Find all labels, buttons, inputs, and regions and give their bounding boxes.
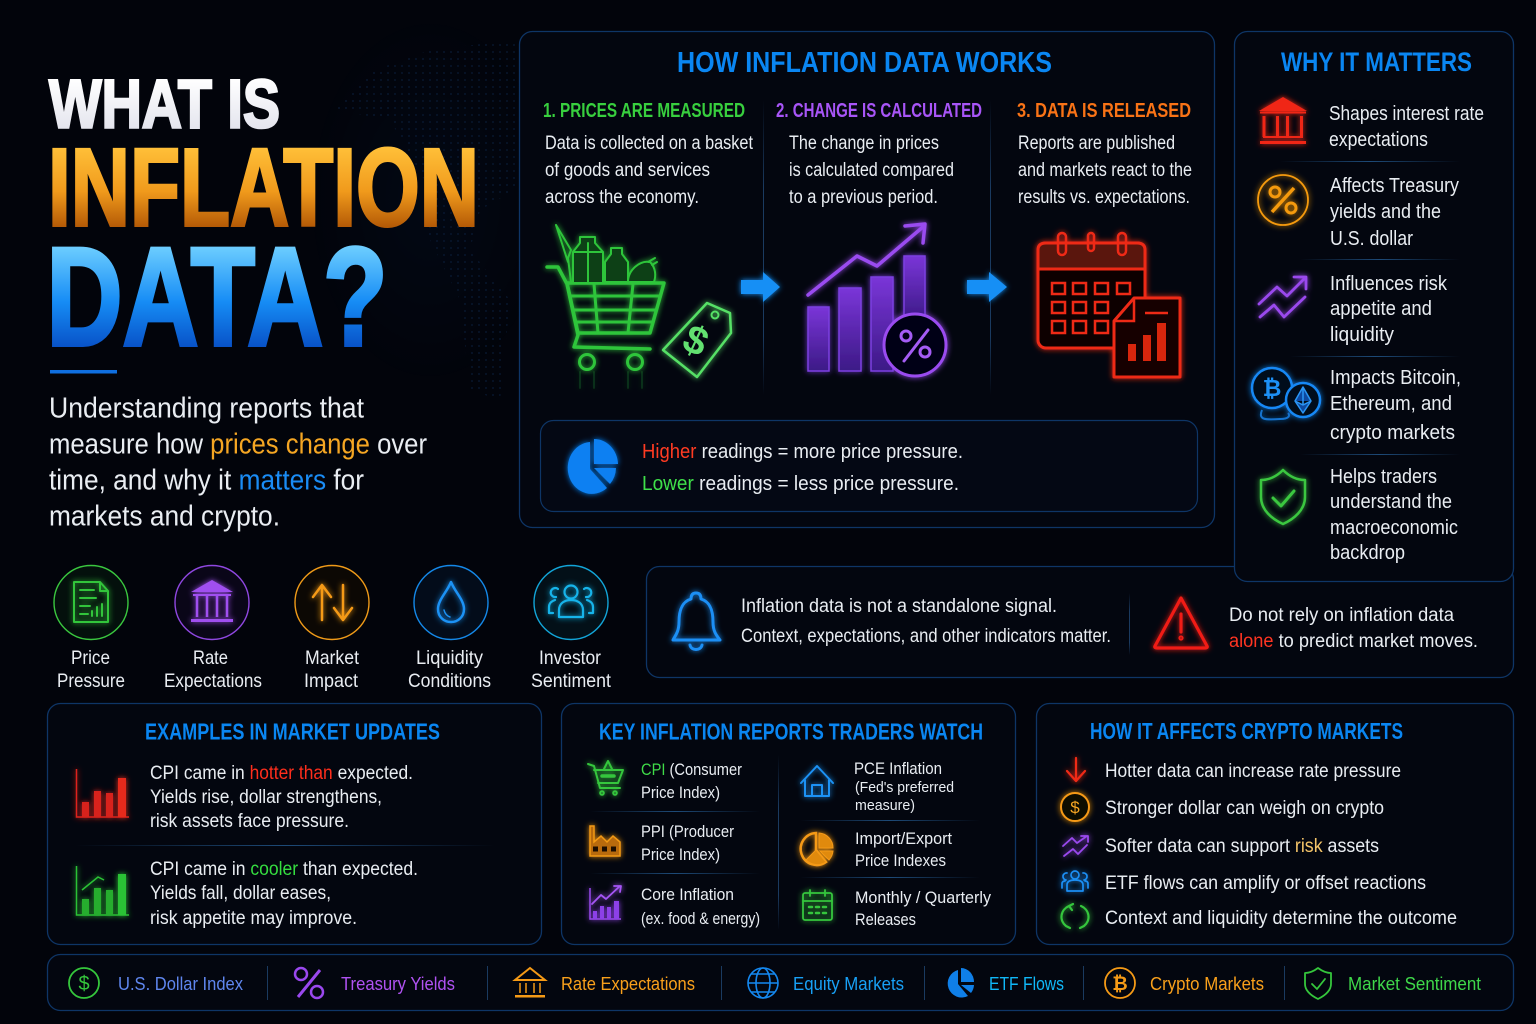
item: rate expectations: Rate Expectations [561, 974, 695, 994]
item text: traders: understand the [1330, 491, 1452, 513]
report text: core: (ex. food & energy) [641, 909, 760, 928]
callout text: Lower readings = less price pressure. [642, 473, 959, 495]
step 2 text: The change in prices [789, 133, 939, 154]
panel: how it affects crypto markets [1036, 704, 1514, 944]
icon: shopping cart with price tag [547, 225, 731, 388]
report text: monthly: Releases [855, 910, 916, 929]
concept: price pressure [54, 566, 128, 692]
concept: rate expectations: Expectations [164, 670, 262, 692]
item text: crypto impact [1330, 367, 1461, 444]
icon: bell [673, 593, 720, 650]
row text: context: Context and liquidity determine the outcome [1105, 908, 1457, 929]
item: treasury yields [295, 968, 455, 998]
icon: purple bar chart with percent [808, 224, 946, 376]
item: rate expectations [515, 968, 695, 998]
report text: PCE [854, 759, 954, 814]
report text: import export [855, 829, 952, 870]
item text: interest rate [1329, 103, 1484, 151]
callout text: Higher readings = more price pressure. [642, 441, 963, 463]
icon: red bank [1259, 97, 1307, 144]
item text: treasury yields [1330, 175, 1459, 250]
icon: red bar chart [76, 769, 129, 817]
item: crypto markets: ₿ [1112, 974, 1128, 995]
item: etf flows [948, 968, 1064, 998]
note text: do not rely: alone to predict market moves. [1229, 631, 1478, 652]
report text: PPI: Price Index) [641, 845, 720, 864]
icon: purple chart [590, 886, 621, 919]
item text: treasury yields: yields and the [1330, 201, 1441, 223]
panel: bottom factor strip [48, 954, 1514, 1010]
title: WHAT IS [49, 66, 280, 143]
report text: PCE: (Fed's preferred [855, 779, 954, 796]
report text: import export: Import/Export [855, 829, 952, 848]
note text: do not rely: Do not rely on inflation data [1229, 605, 1454, 626]
item: market sentiment: Market Sentiment [1348, 974, 1481, 994]
step 1 text: 1. PRICES ARE MEASURED [543, 100, 745, 122]
item text: risk appetite: Influences risk [1330, 273, 1448, 295]
example text: hotter: CPI came in hotter than expected. [150, 763, 413, 784]
item text: crypto impact: crypto markets [1330, 422, 1455, 444]
note text: standalone signal [741, 596, 1111, 647]
subtitle: markets and crypto. [49, 500, 280, 532]
item text: traders [1330, 466, 1458, 564]
item text: risk appetite: appetite and [1330, 298, 1432, 320]
step 1 text: of goods and services [545, 160, 710, 181]
concept: rate expectations: Rate [193, 647, 228, 669]
item: U.S. dollar index: U.S. Dollar Index [118, 974, 243, 994]
icon: green calendar [803, 890, 832, 920]
report text: core [641, 885, 760, 928]
row: five concept icons [54, 566, 612, 692]
callout text [642, 441, 963, 495]
note text: do not rely [1229, 605, 1478, 652]
step 3 text: Reports are published [1018, 133, 1175, 154]
example text: cooler [150, 859, 418, 929]
title: INFLATION [48, 126, 479, 250]
subtitle: time, and why it matters for [49, 464, 364, 496]
report text: monthly: Monthly / Quarterly [855, 888, 991, 907]
item text: crypto impact: Impacts Bitcoin, [1330, 367, 1461, 389]
icon: green cycle [1061, 904, 1089, 928]
title [46, 66, 479, 375]
icon: blue pie chart [568, 439, 618, 494]
item text: crypto impact: Ethereum, and [1330, 393, 1452, 415]
item: U.S. dollar index: $ [78, 973, 90, 995]
item text: interest rate: Shapes interest rate [1329, 103, 1484, 125]
icon: red down arrow [1067, 758, 1085, 781]
concept: investor sentiment: Sentiment [531, 670, 612, 692]
concept: price pressure: Pressure [57, 670, 125, 692]
icon: green bar chart [76, 866, 129, 915]
panel: key inflation reports [562, 704, 1016, 944]
example text: hotter [150, 763, 413, 832]
heading: crypto effects: HOW IT AFFECTS CRYPTO MARKETS [1090, 718, 1403, 744]
panel: how inflation data works [520, 32, 1214, 528]
item: etf flows: ETF Flows [989, 974, 1064, 994]
subtitle [49, 392, 427, 532]
icon: purple trend [1063, 836, 1088, 856]
item text: traders: Helps traders [1330, 466, 1437, 488]
concept: market impact: Market [305, 647, 360, 669]
note text: standalone signal: Context, expectations, and other indicators matter. [741, 626, 1111, 647]
step 1 text [543, 100, 754, 208]
subtitle: Understanding reports that [49, 392, 364, 424]
step 3 text [1017, 100, 1192, 208]
title underline [50, 370, 117, 374]
step 3 text: 3. DATA IS RELEASED [1017, 100, 1191, 122]
step 1 text: across the economy. [545, 187, 699, 208]
concept: investor sentiment: Investor [539, 647, 601, 669]
report text: PPI [641, 822, 734, 864]
item: market sentiment [1305, 968, 1481, 999]
item: treasury yields: Treasury Yields [341, 974, 455, 994]
icon: dollar coin: $ [1070, 798, 1080, 817]
step 3 text: results vs. expectations. [1018, 187, 1190, 208]
item: crypto markets: Crypto Markets [1150, 974, 1264, 994]
concept: rate expectations [164, 566, 262, 692]
panel: caution notes [646, 566, 1514, 678]
example text: cooler: risk appetite may improve. [150, 908, 357, 929]
step 2 text: to a previous period. [789, 187, 938, 208]
concept: price pressure: Price [71, 647, 110, 669]
report text: CPI: CPI (Consumer [641, 760, 742, 779]
concept: market impact [295, 566, 369, 692]
concept: liquidity conditions [408, 566, 491, 692]
example text: cooler: Yields fall, dollar eases, [150, 883, 331, 904]
decorative dotted world map [310, 20, 550, 400]
arrow 2 [967, 272, 1007, 302]
example text: hotter: Yields rise, dollar strengthens, [150, 787, 382, 808]
item: crypto markets [1105, 968, 1264, 998]
example text: hotter: risk assets face pressure. [150, 811, 349, 832]
item: equity markets [748, 968, 904, 998]
icon: orange percent circle [1258, 175, 1308, 225]
report text: PCE: measure) [855, 797, 915, 814]
icon: blue people [1062, 871, 1088, 891]
arrow 1 [741, 272, 780, 302]
row text: softer data: Softer data can support risk assets [1105, 836, 1379, 857]
report text: import export: Price Indexes [855, 851, 946, 870]
heading: how inflation data works: HOW INFLATION DATA WORKS [677, 47, 1052, 79]
item text: treasury yields: U.S. dollar [1330, 228, 1413, 250]
icon: warning triangle [1155, 598, 1207, 648]
item text: risk appetite [1330, 273, 1448, 346]
report text: CPI [641, 760, 742, 802]
step 1 text: Data is collected on a basket [545, 133, 754, 154]
item text: traders: backdrop [1330, 542, 1405, 564]
item text: risk appetite: liquidity [1330, 324, 1394, 346]
concept: market impact: Impact [304, 670, 359, 692]
step 2 text: is calculated compared [789, 160, 954, 181]
concept: liquidity conditions: Liquidity [416, 647, 483, 669]
icon: purple trend lines [1259, 277, 1306, 317]
report text: monthly [855, 888, 991, 929]
callout: higher / lower readings [540, 420, 1198, 512]
title: DATA? [46, 218, 388, 375]
item: U.S. dollar index [69, 968, 243, 998]
note text: standalone signal: Inflation data is not a standalone signal. [741, 596, 1057, 617]
step 2 text [776, 100, 982, 208]
panel: why it matters [1234, 32, 1514, 582]
report text: PCE: PCE Inflation [854, 759, 942, 778]
row text: stronger dollar: Stronger dollar can weigh on crypto [1105, 798, 1384, 819]
heading: examples: EXAMPLES IN MARKET UPDATES [145, 718, 440, 744]
icon: dollar coin [1061, 793, 1089, 821]
step 3 text: and markets react to the [1018, 160, 1192, 181]
item: equity markets: Equity Markets [793, 974, 904, 994]
report text: CPI: Price Index) [641, 783, 720, 802]
icon: bitcoin and ethereum coins [1252, 368, 1320, 419]
item text: traders: macroeconomic [1330, 517, 1458, 539]
heading: why it matters: WHY IT MATTERS [1281, 47, 1472, 77]
icon: bitcoin and ethereum coins: ₿ [1263, 375, 1281, 401]
concept: investor sentiment [531, 566, 612, 692]
panel: examples in market updates [48, 704, 542, 944]
item text: interest rate: expectations [1329, 129, 1428, 151]
icon: orange pie [801, 833, 833, 865]
icon: orange factory [590, 826, 620, 856]
report text: core: Core Inflation [641, 885, 734, 904]
concept: liquidity conditions: Conditions [408, 670, 491, 692]
icon: red calendar with report [1038, 233, 1180, 377]
subtitle: measure how prices change over [49, 428, 427, 460]
item text: treasury yields: Affects Treasury [1330, 175, 1459, 197]
icon: green shield [1261, 470, 1305, 524]
row text: rate pressure: Hotter data can increase rate pressure [1105, 761, 1401, 782]
heading: key reports: KEY INFLATION REPORTS TRADERS WATCH [599, 718, 983, 744]
icon text: dollar in tag: $ [676, 316, 715, 366]
step 2 text: 2. CHANGE IS CALCULATED [776, 100, 982, 122]
icon: green cart [588, 761, 623, 795]
row text: etf flows: ETF flows can amplify or offset reactions [1105, 873, 1426, 894]
example text: cooler: CPI came in cooler than expected. [150, 859, 418, 880]
report text: PPI: PPI (Producer [641, 822, 734, 841]
icon: blue house [801, 766, 833, 796]
